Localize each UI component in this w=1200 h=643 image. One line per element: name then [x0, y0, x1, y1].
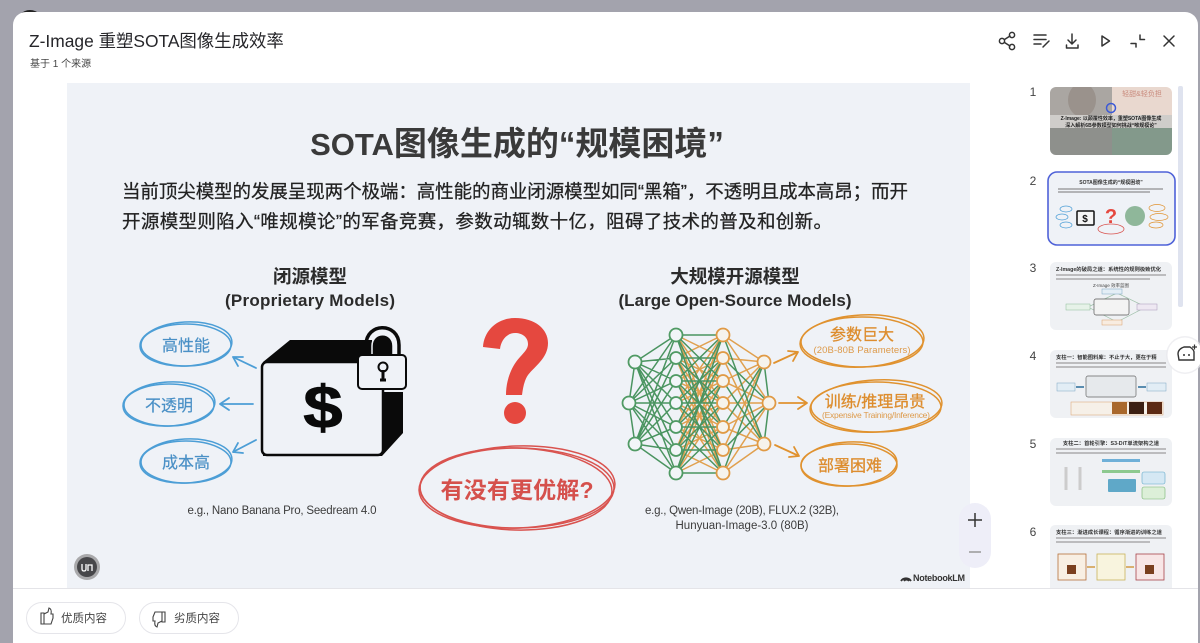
slide numbers: 4 — [1030, 349, 1037, 363]
icon: pause button badge — [74, 554, 100, 580]
oval: hard to deploy — [800, 440, 898, 488]
icon: locked safe: $ — [303, 374, 343, 441]
oval: huge parameters: (20B-80B Parameters) — [814, 345, 910, 356]
slide numbers: 1 — [1030, 85, 1037, 99]
heading: proprietary models: (Proprietary Models) — [225, 291, 395, 310]
thumbnail 3 — [1050, 262, 1172, 330]
panel: proprietary models — [122, 266, 406, 517]
oval: high performance — [139, 320, 233, 368]
panel: large open-source models — [618, 266, 943, 532]
thumbnail 1: 轻甜&轻负担 — [1122, 89, 1162, 98]
icon: close — [1164, 36, 1174, 46]
thumbnail 3: Z-Image 效率蓝图 — [1093, 282, 1129, 289]
thumbnail 1: Z-Image: 以颠覆性效率，重塑SOTA图像生成 — [1061, 115, 1161, 122]
oval: better solution: 有没有更优解? — [440, 477, 594, 503]
thumbnail 1: 深入解析6B参数模型如何挑战“唯规模论” — [1065, 122, 1157, 129]
slide numbers: 3 — [1030, 261, 1037, 275]
oval: high cost — [139, 437, 233, 485]
icon: collapse — [1131, 35, 1144, 47]
floating assistant button — [1166, 336, 1200, 374]
heading: open-source models: (Large Open-Source Models) — [618, 291, 852, 310]
thumbnail 2 selected: SOTA图像生成的“规模困境” — [1079, 179, 1143, 186]
thumbnail 6: 支柱三：渐进成长课程：循序渐进的训练之道 — [1056, 528, 1163, 536]
button: good content: 优质内容 — [61, 611, 107, 625]
thumbnail 1 — [1050, 83, 1172, 155]
button: good content — [26, 602, 126, 634]
icon: edit list — [1034, 35, 1049, 47]
icon: play — [1102, 36, 1110, 46]
oval: better solution — [418, 443, 616, 532]
neural network diagram — [622, 328, 776, 480]
icon: question mark — [483, 318, 548, 424]
thumbnail 4: 支柱一：智能图料库：不止于大，更在于精 — [1056, 353, 1157, 361]
heading: open-source models — [618, 266, 852, 310]
thumbnail 6 — [1050, 525, 1172, 588]
main slide — [67, 83, 970, 588]
intro paragraph: 当前顶尖模型的发展呈现两个极端：高性能的商业闭源模型如同“黑箱”，不透明且成本高昂；而开 — [122, 181, 908, 202]
arrows: network to properties — [774, 351, 807, 457]
thumbnail 2 selected: $ — [1082, 214, 1088, 225]
examples: open-source — [645, 505, 839, 532]
slide numbers: 2 — [1030, 174, 1037, 188]
thumbnail 2 selected: ? — [1105, 206, 1117, 228]
thumbnail 5: 支柱二：首轮引擎：S3-DiT单流架构之道 — [1063, 439, 1160, 447]
button: poor content — [140, 602, 238, 634]
arrows: safe to properties — [220, 357, 256, 453]
heading: proprietary models — [225, 266, 395, 310]
oval: high cost: 成本高 — [162, 454, 210, 472]
thumbnail 4 — [1050, 350, 1172, 418]
thumbnail 5 — [1050, 438, 1172, 506]
slide numbers: 6 — [1030, 525, 1037, 539]
slide heading: SOTA图像生成的“规模困境” — [310, 125, 724, 162]
oval: hard to deploy: 部署困难 — [818, 457, 882, 475]
oval: expensive training: 训练/推理昂贵 — [825, 393, 925, 411]
icon: share — [999, 32, 1015, 50]
scrollbar — [1178, 86, 1183, 307]
oval: huge parameters: 参数巨大 — [830, 326, 894, 344]
oval: high performance: 高性能 — [162, 337, 210, 355]
slide numbers: 5 — [1030, 437, 1037, 451]
heading: proprietary models: 闭源模型 — [273, 266, 347, 287]
examples: proprietary: e.g., Nano Banana Pro, Seedream 4.0 — [188, 505, 376, 517]
toolbar icons — [999, 32, 1174, 50]
panel: central question — [418, 318, 616, 532]
oval: opaque: 不透明 — [145, 397, 193, 415]
source count: 基于 1 个来源 — [30, 57, 91, 70]
oval: expensive training — [809, 377, 943, 435]
icon: download — [1066, 34, 1078, 48]
thumbnail rail — [1030, 83, 1183, 588]
intro paragraph: 开源模型则陷入“唯规模论”的军备竞赛，参数动辄数十亿，阻碍了技术的普及和创新。 — [122, 211, 832, 232]
heading: open-source models: 大规模开源模型 — [670, 266, 800, 287]
thumbnail 2 selected — [1048, 172, 1175, 245]
thumbnail 3: Z-Image的破局之道：系统性的规则极致优化 — [1056, 265, 1162, 273]
oval: opaque — [122, 380, 216, 428]
oval: huge parameters — [799, 312, 925, 370]
modal title: Z-Image 重塑SOTA图像生成效率 — [29, 31, 284, 51]
button: poor content: 劣质内容 — [174, 611, 220, 625]
icon: locked safe — [262, 328, 406, 456]
slide numbers — [1030, 85, 1037, 539]
NotebookLM watermark: NotebookLM — [913, 573, 965, 583]
examples: open-source: Hunyuan-Image-3.0 (80B) — [676, 520, 809, 532]
intro paragraph — [122, 181, 908, 232]
examples: open-source: e.g., Qwen-Image (20B), FLUX.2 (32B), — [645, 505, 839, 517]
footer bar — [13, 588, 1198, 643]
oval: expensive training: (Expensive Training/Inference) — [822, 410, 930, 420]
zoom control — [959, 503, 991, 568]
